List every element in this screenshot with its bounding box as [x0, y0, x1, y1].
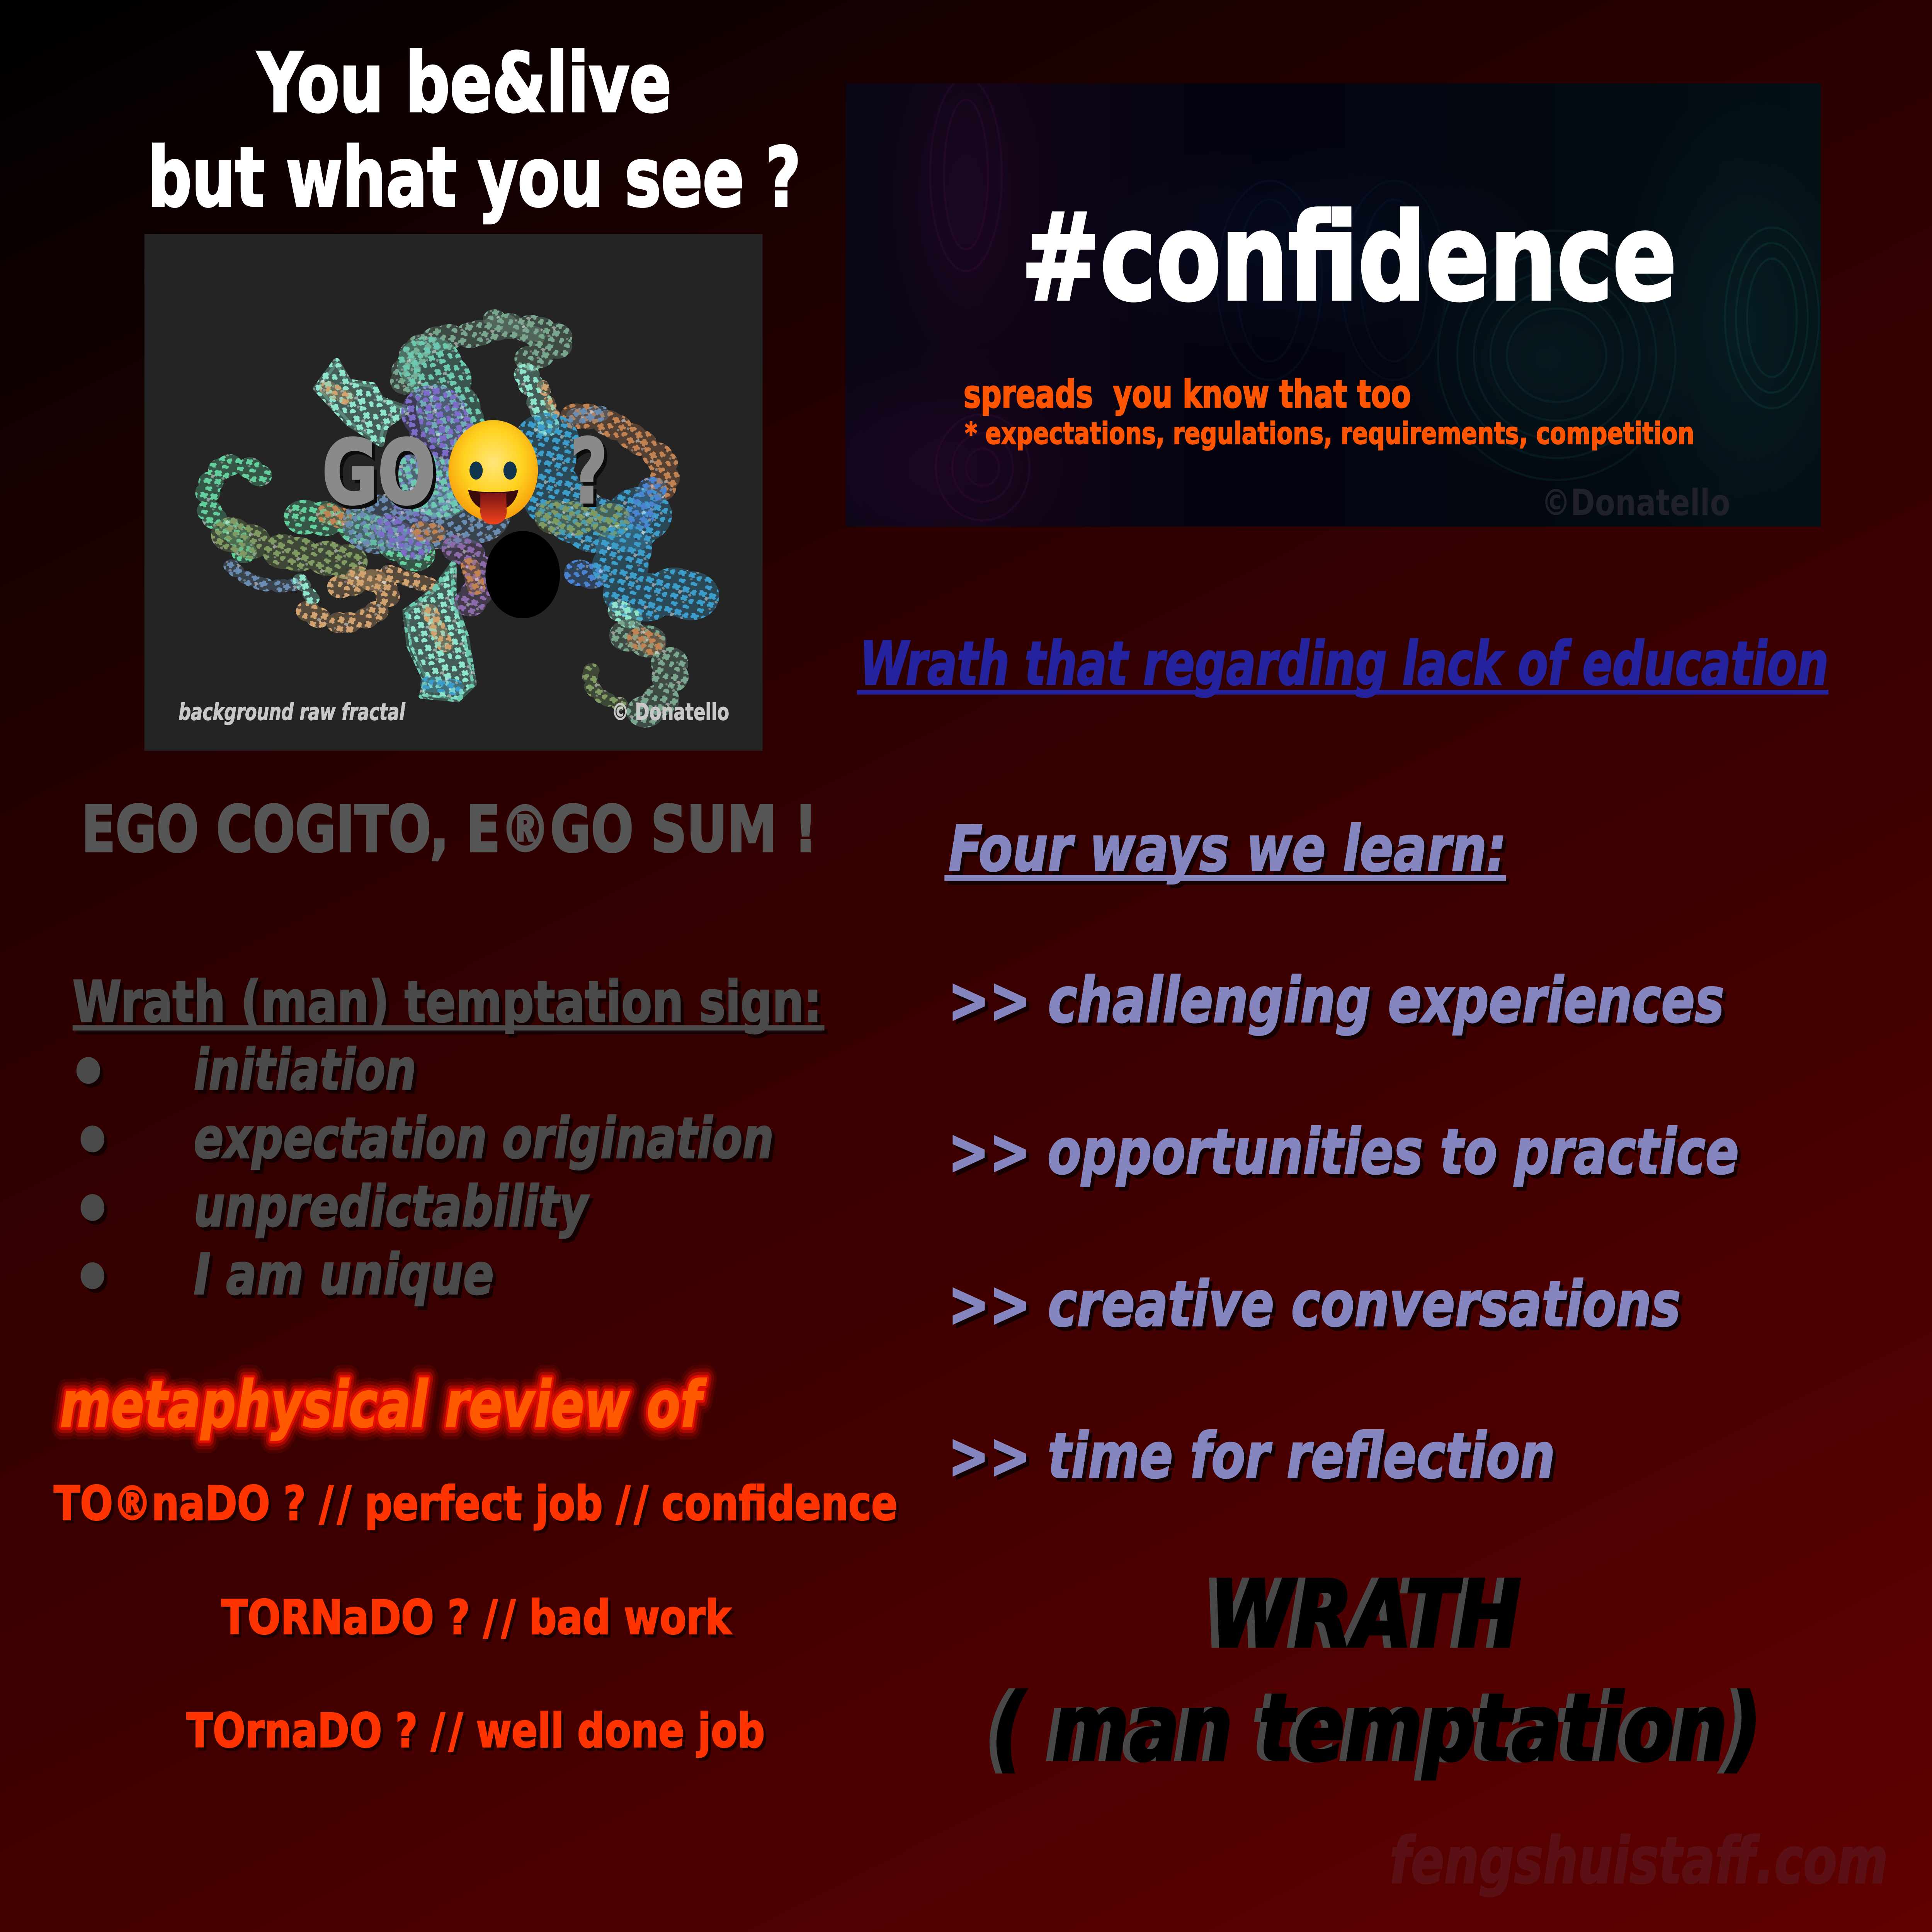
- heading: metaphysical review: metaphysical review of: [60, 1367, 707, 1442]
- item: I am unique: I am unique: [194, 1242, 494, 1307]
- tornado lines: [54, 1476, 900, 1761]
- list: wrath temptation signs: [73, 969, 828, 1311]
- GO text: GO: [325, 425, 439, 528]
- watermark: ©Donatello: [1541, 481, 1730, 524]
- item: expectation origination: expectation origination: [197, 1110, 777, 1175]
- item: initiation: initiation: [194, 1037, 416, 1102]
- fractal artwork: [207, 319, 693, 719]
- heading: metaphysical review: metaphysical review of: [60, 1367, 707, 1442]
- list heading: Wrath (man) temptation sign:: [76, 973, 825, 1039]
- title: but what you see ?: [148, 130, 801, 225]
- heading: man temptation: ( man temptation): [985, 1673, 1755, 1782]
- tornado lines: TO®naDO ? / / perfect job / / confidence: [54, 1476, 898, 1531]
- item: creative conversations: >> creative conversations: [948, 1268, 1680, 1340]
- icon: tongue-out emoji: [449, 420, 538, 524]
- black oval: [485, 531, 560, 618]
- panel: confidence: [845, 83, 1821, 527]
- heading: WRATH: WRATH: [1202, 1560, 1514, 1668]
- heading: man temptation: ( man temptation): [992, 1673, 1762, 1782]
- item: opportunities to practice: >> opportunities to practice: [951, 1119, 1742, 1192]
- list heading: Wrath (man) temptation sign:: [73, 969, 821, 1035]
- tornado lines: TO®naDO ? / / perfect job / / confidence: [56, 1480, 900, 1534]
- heading: ego cogito: EGO COGITO, E®GO SUM !: [82, 792, 817, 866]
- question mark: ?: [570, 420, 607, 524]
- caption: background raw fractal: background raw fractal: [179, 699, 405, 726]
- question mark: ?: [573, 424, 611, 527]
- item: expectation origination: expectation origination: [194, 1106, 774, 1171]
- panel: fractal image: [145, 234, 763, 751]
- subheading: spreads you know that too: [964, 372, 1411, 416]
- heading: metaphysical review: metaphysical review of: [60, 1367, 707, 1442]
- item: time for reflection: >> time for reflection: [948, 1420, 1555, 1492]
- detail line: * expectations, regulations, requirements, competition: [965, 416, 1694, 451]
- title: [148, 36, 801, 225]
- item: challenging experiences: >> challenging experiences: [951, 968, 1728, 1040]
- heading: WRATH: WRATH: [1209, 1560, 1521, 1668]
- tornado lines: TORNaDO ? / / bad work: [221, 1590, 732, 1645]
- item: initiation: initiation: [197, 1041, 420, 1106]
- list: four ways we learn: [944, 813, 1742, 1496]
- item: time for reflection: >> time for reflection: [951, 1423, 1558, 1496]
- title: You be&live: [257, 36, 672, 131]
- list heading: Four ways we learn:: [949, 813, 1507, 885]
- caption: copyright: © Donatello: [612, 699, 729, 726]
- item: I am unique: [81, 1242, 497, 1311]
- GO text: GO: [322, 422, 435, 524]
- heading: metaphysical review: metaphysical review of: [60, 1367, 707, 1442]
- item: creative conversations: >> creative conversations: [951, 1272, 1684, 1344]
- item: I am unique: I am unique: [197, 1246, 497, 1311]
- item: opportunities to practice: >> opportunities to practice: [948, 1116, 1739, 1188]
- tornado lines: TORNaDO ? / / bad work: [224, 1594, 735, 1648]
- item: unpredictability: unpredictability: [194, 1174, 590, 1240]
- item: initiation: [77, 1037, 420, 1106]
- item: unpredictability: [81, 1174, 593, 1243]
- heading: metaphysical review: metaphysical review of: [60, 1367, 707, 1442]
- item: challenging experiences: >> challenging experiences: [948, 964, 1724, 1036]
- list heading: Four ways we learn:: [952, 816, 1510, 889]
- tornado lines: TOrnaDO ? / / well done job: [189, 1707, 767, 1761]
- tornado lines: TOrnaDO ? / / well done job: [187, 1704, 765, 1758]
- hashtag heading: #confidence: [1021, 188, 1677, 328]
- item: unpredictability: unpredictability: [197, 1178, 593, 1243]
